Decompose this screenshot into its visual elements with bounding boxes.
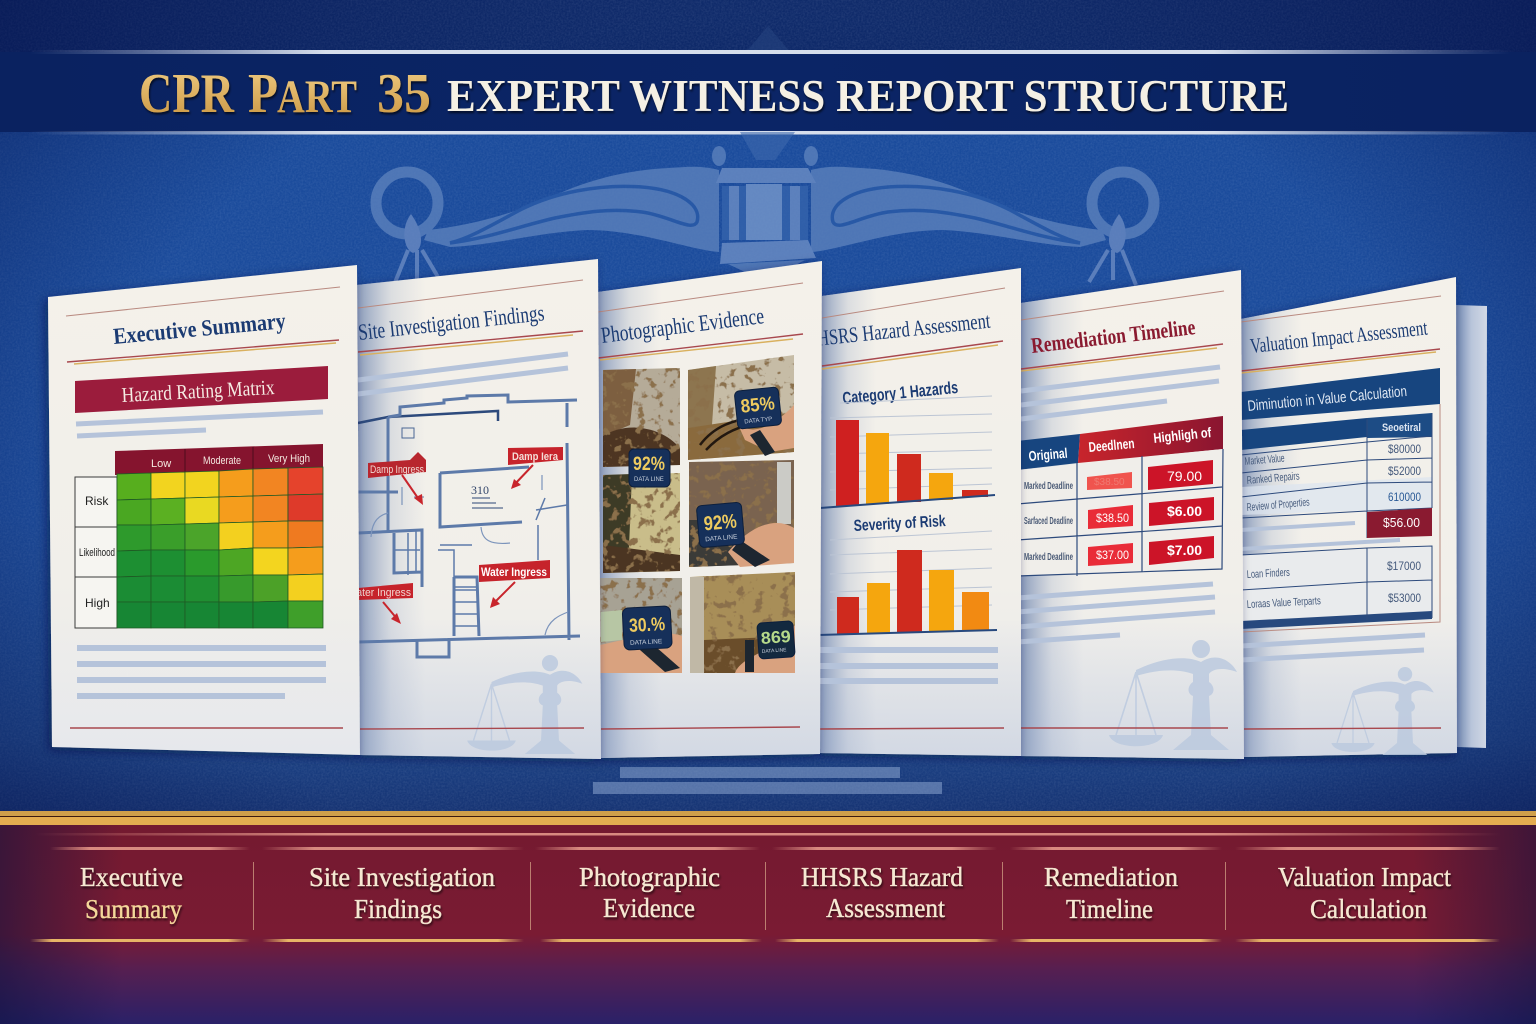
hazard matrix: [75, 444, 323, 628]
calculation table: Review of Properties: [1246, 497, 1310, 514]
page 1: executive summary: [48, 265, 360, 755]
damage callouts: [347, 447, 563, 624]
moisture badges: DATA LINE: [634, 477, 664, 483]
scales of justice watermark: [376, 132, 1154, 285]
calculation table: $56.00: [1383, 515, 1420, 530]
chart: severity of risk: Severity of Risk: [853, 513, 946, 535]
page 4: HHSRS hazard assessment: [804, 268, 1021, 756]
summary table: $17000: [1387, 559, 1421, 573]
label: site investigation findings: Site Investigation: [309, 862, 495, 892]
damage callouts: Damp Ingress: [370, 464, 424, 476]
calculation banner: Diminution in Value Calculation: [1247, 383, 1408, 415]
calculation table: $80000: [1388, 442, 1421, 456]
footer band: [0, 811, 1536, 1024]
pedestal: [593, 767, 942, 794]
label: site investigation findings: [309, 862, 495, 924]
calculation table: Ranked Repairs: [1246, 470, 1300, 487]
moisture badges: 92%: [703, 511, 738, 535]
label: executive summary: Summary: [85, 894, 182, 924]
label: valuation impact calculation: Valuation Impact: [1278, 862, 1451, 892]
timeline table: $38.50: [1096, 511, 1129, 525]
title: [139, 63, 1289, 125]
calculation table: Market Value: [1244, 453, 1285, 468]
label: remediation timeline: Timeline: [1066, 894, 1153, 924]
scale watermark: [467, 655, 582, 754]
timeline table: 79.00: [1167, 468, 1202, 484]
page 5: remediation timeline: [1017, 270, 1244, 759]
summary table: Loraas Value Terparts: [1247, 595, 1321, 611]
moisture badges: 869: [760, 627, 791, 648]
moisture badges: [622, 387, 795, 659]
chart: category 1 hazards: [820, 378, 995, 508]
label: executive summary: [80, 862, 183, 924]
label: executive summary: Executive: [80, 862, 183, 892]
heading: Remediation Timeline: [1030, 314, 1197, 358]
timeline table: [1017, 416, 1223, 576]
heading: Site Investigation Findings: [357, 300, 546, 345]
title: P: [248, 63, 278, 125]
moisture badges: 85%: [740, 393, 776, 418]
hazard matrix: Likelihood: [79, 547, 115, 559]
hazard matrix: Low: [151, 458, 171, 470]
timeline table: $6.00: [1167, 503, 1202, 519]
timeline table: Marked Deadline: [1024, 481, 1073, 492]
label: valuation impact calculation: Calculation: [1310, 894, 1427, 924]
hazard matrix: Moderate: [203, 455, 241, 467]
timeline table: Deedlnen: [1088, 435, 1135, 455]
moisture badges: DATA LINE: [630, 638, 663, 647]
damage callouts: Water Ingress: [481, 565, 547, 579]
moisture badges: DATA LINE: [705, 533, 738, 543]
summary table: Loan Finders: [1247, 567, 1290, 581]
damage callouts: Water Ingress: [347, 587, 411, 599]
label: remediation timeline: [1044, 862, 1178, 924]
timeline table: Sarfaced Deadline: [1024, 516, 1073, 527]
title: 35: [377, 63, 431, 125]
label: photographic evidence: Evidence: [603, 893, 695, 923]
timeline table: $38.50: [1094, 477, 1125, 488]
heading: Executive Summary: [112, 308, 287, 349]
photo grid: [600, 355, 795, 673]
calculation table: Seoetiral: [1382, 422, 1421, 434]
hazard rating banner: [75, 366, 328, 413]
title: EXPERT WITNESS REPORT STRUCTURE: [447, 70, 1289, 121]
heading: Photographic Evidence: [600, 303, 765, 348]
page 6: valuation impact assessment: [1241, 277, 1457, 757]
hazard matrix: Very High: [268, 453, 310, 465]
moisture badges: DATA TYP: [744, 417, 773, 425]
hazard rating banner: Hazard Rating Matrix: [121, 375, 275, 407]
chart: category 1 hazards: Category 1 Hazards: [842, 378, 959, 408]
hazard matrix: High: [85, 596, 110, 610]
moisture badges: DATA LINE: [762, 647, 787, 655]
page 3: photographic evidence: [598, 261, 822, 758]
moisture badges: 92%: [633, 454, 665, 475]
label: photographic evidence: [579, 862, 720, 923]
hazard matrix: Risk: [85, 494, 109, 508]
heading: Valuation Impact Assessment: [1249, 315, 1429, 358]
damage callouts: Damp Iera: [512, 451, 559, 463]
summary table: $53000: [1388, 591, 1421, 605]
timeline table: Highligh of: [1153, 424, 1212, 446]
summary table: [1241, 404, 1440, 632]
timeline table: Original: [1028, 445, 1068, 464]
label: photographic evidence: Photographic: [579, 862, 720, 892]
label: site investigation findings: Findings: [354, 894, 442, 924]
chart: severity of risk: [818, 513, 997, 635]
timeline table: $7.00: [1167, 542, 1202, 558]
label: remediation timeline: Remediation: [1044, 862, 1178, 892]
timeline table: $37.00: [1096, 548, 1129, 562]
label: valuation impact calculation: [1278, 862, 1451, 924]
floor plan: [358, 395, 580, 657]
hands holding meters: [600, 405, 795, 673]
label: HHSRS hazard assessment: Assessment: [826, 893, 945, 923]
calculation table: $52000: [1388, 464, 1421, 478]
floor plan: 310: [471, 483, 489, 497]
back sheet: [1456, 305, 1487, 748]
scale watermark: [1331, 667, 1434, 755]
calculation table: 610000: [1388, 490, 1421, 504]
title: CPR: [139, 63, 234, 125]
calculation banner: [1241, 368, 1440, 420]
moisture badges: 30.%: [629, 614, 666, 637]
heading: HHSRS Hazard Assessment: [804, 308, 992, 352]
calculation table: [1241, 413, 1432, 549]
title: ART: [277, 71, 357, 123]
label: HHSRS hazard assessment: [801, 862, 963, 923]
timeline table: Marked Deadline: [1024, 552, 1073, 563]
scale watermark: [1109, 640, 1237, 750]
page 2: site investigation findings: [347, 259, 601, 759]
header band: [0, 26, 1536, 134]
label: HHSRS hazard assessment: HHSRS Hazard: [801, 862, 963, 892]
